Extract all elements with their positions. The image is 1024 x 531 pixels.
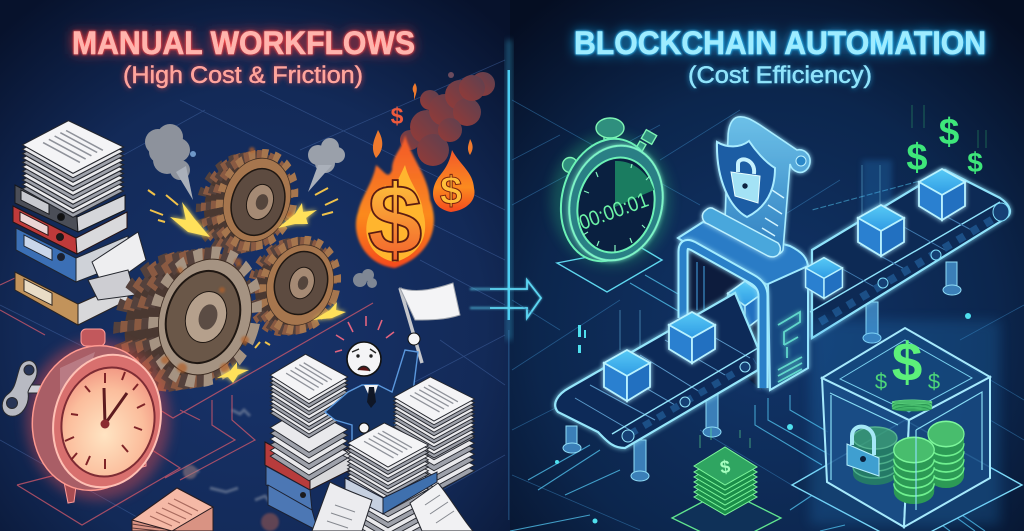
title: manual workflows: MANUAL WORKFLOWS xyxy=(72,25,415,61)
icon: peach paper stack xyxy=(132,488,213,531)
tick marks xyxy=(65,372,145,469)
dial face xyxy=(568,149,664,261)
dollars over vault: $ xyxy=(892,331,922,393)
icon: transparent vault with coins: $ xyxy=(928,369,940,394)
dark binder xyxy=(15,185,125,232)
icon: scanner gate body xyxy=(678,222,808,390)
left face xyxy=(822,378,909,527)
icon: loose sheets xyxy=(312,482,473,531)
big dollar sign: $ xyxy=(368,164,422,274)
icon: smart contract scroll xyxy=(702,117,810,257)
suit body xyxy=(325,350,418,445)
icon: paper pile left of man xyxy=(270,354,348,481)
clock face xyxy=(50,358,166,486)
big flame xyxy=(356,135,434,268)
paper pile on binders xyxy=(22,121,124,217)
blue binder xyxy=(16,228,128,282)
title: blockchain automation: BLOCKCHAIN AUTOMATION xyxy=(574,25,986,61)
digital time: 00:00:01 xyxy=(576,188,652,235)
flame sparks xyxy=(373,83,473,158)
icon: grey smoke puffs xyxy=(145,124,377,288)
subtitle: high cost and friction: (High Cost & Friction) xyxy=(123,62,363,89)
icon: three rusty gears xyxy=(104,146,347,397)
icon: gate front arch and pillar detail xyxy=(683,244,802,388)
clock body xyxy=(17,332,173,504)
door details xyxy=(830,392,982,510)
loose sheet xyxy=(92,232,146,290)
head xyxy=(347,342,381,376)
icon: burning dollars with smoke xyxy=(356,72,495,274)
icon: cubes on upper belt xyxy=(858,169,965,256)
icon: binders under paper piles xyxy=(265,442,350,531)
figure: stressed man with white flag xyxy=(325,283,460,445)
icon: green dollars above conveyor xyxy=(906,105,986,179)
stress marks xyxy=(335,316,394,352)
icon: smoky debris xyxy=(183,410,279,531)
outer ring back xyxy=(548,129,668,271)
icon: blue binder in front pile xyxy=(345,472,437,514)
lock xyxy=(731,159,760,203)
title: blockchain automation: BLOCKCHAIN AUTOMATION xyxy=(574,25,986,61)
gear: right xyxy=(241,232,347,340)
icon: green stopwatch xyxy=(548,118,675,292)
circuit lines right xyxy=(510,175,985,531)
shield xyxy=(717,141,775,217)
title: manual workflows: MANUAL WORKFLOWS xyxy=(72,25,415,61)
right face xyxy=(904,377,990,527)
background: right panel xyxy=(510,0,1024,531)
shirt and tie xyxy=(364,385,378,402)
icon: transparent vault with coins xyxy=(792,320,1022,531)
vault padlock xyxy=(847,427,879,476)
panel: manual workflows xyxy=(0,25,505,531)
divider: central glowing line xyxy=(506,40,512,520)
title: manual workflows: MANUAL WORKFLOWS xyxy=(72,25,415,61)
wind key xyxy=(2,361,44,416)
icon: cube on gate right xyxy=(806,258,842,298)
icon: light beams behind conveyor xyxy=(620,160,892,350)
front ring xyxy=(557,136,675,270)
green wedge xyxy=(615,161,654,207)
floating red dollar: $ xyxy=(391,103,404,129)
subtitle: cost efficiency: (Cost Efficiency) xyxy=(688,62,872,89)
panel: blockchain automation xyxy=(510,25,1024,531)
icon: red alarm clock xyxy=(2,329,175,504)
faint floor grid left xyxy=(0,60,505,530)
vault platform xyxy=(792,420,1022,531)
coin stacks xyxy=(853,427,897,485)
red binder xyxy=(13,206,127,254)
icon: green dollars above conveyor: $ xyxy=(939,111,960,152)
icon: green dollars above conveyor: $ xyxy=(906,137,928,179)
subtitle: cost efficiency: (Cost Efficiency) xyxy=(688,62,872,89)
front ring xyxy=(39,343,175,499)
icon: cubes on lower belt xyxy=(604,312,715,401)
icon: front paper pile xyxy=(348,423,428,531)
icon: conveyor upper section xyxy=(810,170,1010,338)
icon: transparent vault with coins: $ xyxy=(875,369,887,394)
clock hands xyxy=(104,388,127,424)
scroll bottom roller xyxy=(702,208,780,257)
stopwatch platform xyxy=(557,247,662,292)
face xyxy=(352,349,376,371)
circuit lines left xyxy=(0,278,373,525)
tan binder xyxy=(15,272,128,325)
small dollar sign: $ xyxy=(440,169,462,213)
hands xyxy=(408,333,420,345)
gear: top xyxy=(189,146,305,258)
background: left panel xyxy=(0,0,510,531)
smoke trail xyxy=(400,72,495,166)
icon: cash stack on platform xyxy=(672,428,781,531)
gate interior xyxy=(683,244,762,390)
icon: sparks xyxy=(148,188,346,383)
icon: paper pile right of man xyxy=(394,377,474,493)
gate top surface xyxy=(678,222,808,285)
icon: cash stack on platform: $ xyxy=(719,456,731,478)
icon: stacked papers and binders xyxy=(13,121,146,325)
feet xyxy=(64,456,146,503)
icon: conveyor legs xyxy=(563,262,961,481)
small flame xyxy=(433,150,475,212)
arrow: from manual to blockchain xyxy=(470,280,541,318)
top face xyxy=(822,328,990,420)
gear: large xyxy=(104,242,271,397)
tick marks xyxy=(583,164,650,252)
icon: data nodes xyxy=(555,313,971,524)
rust patches xyxy=(161,147,334,373)
knob xyxy=(81,329,105,359)
title: blockchain automation: BLOCKCHAIN AUTOMATION xyxy=(574,25,986,61)
icon: green dollars above conveyor: $ xyxy=(967,147,983,178)
icon: cube entering gate xyxy=(728,281,762,330)
subtitle: high cost and friction: (High Cost & Friction) xyxy=(123,62,363,89)
crown stem and buttons xyxy=(562,118,657,172)
gate right pillar xyxy=(768,266,808,390)
flag pole xyxy=(400,288,422,363)
white flag xyxy=(400,283,460,320)
faint floor grid right xyxy=(512,100,1024,530)
icon: conveyor lower section xyxy=(555,293,758,448)
